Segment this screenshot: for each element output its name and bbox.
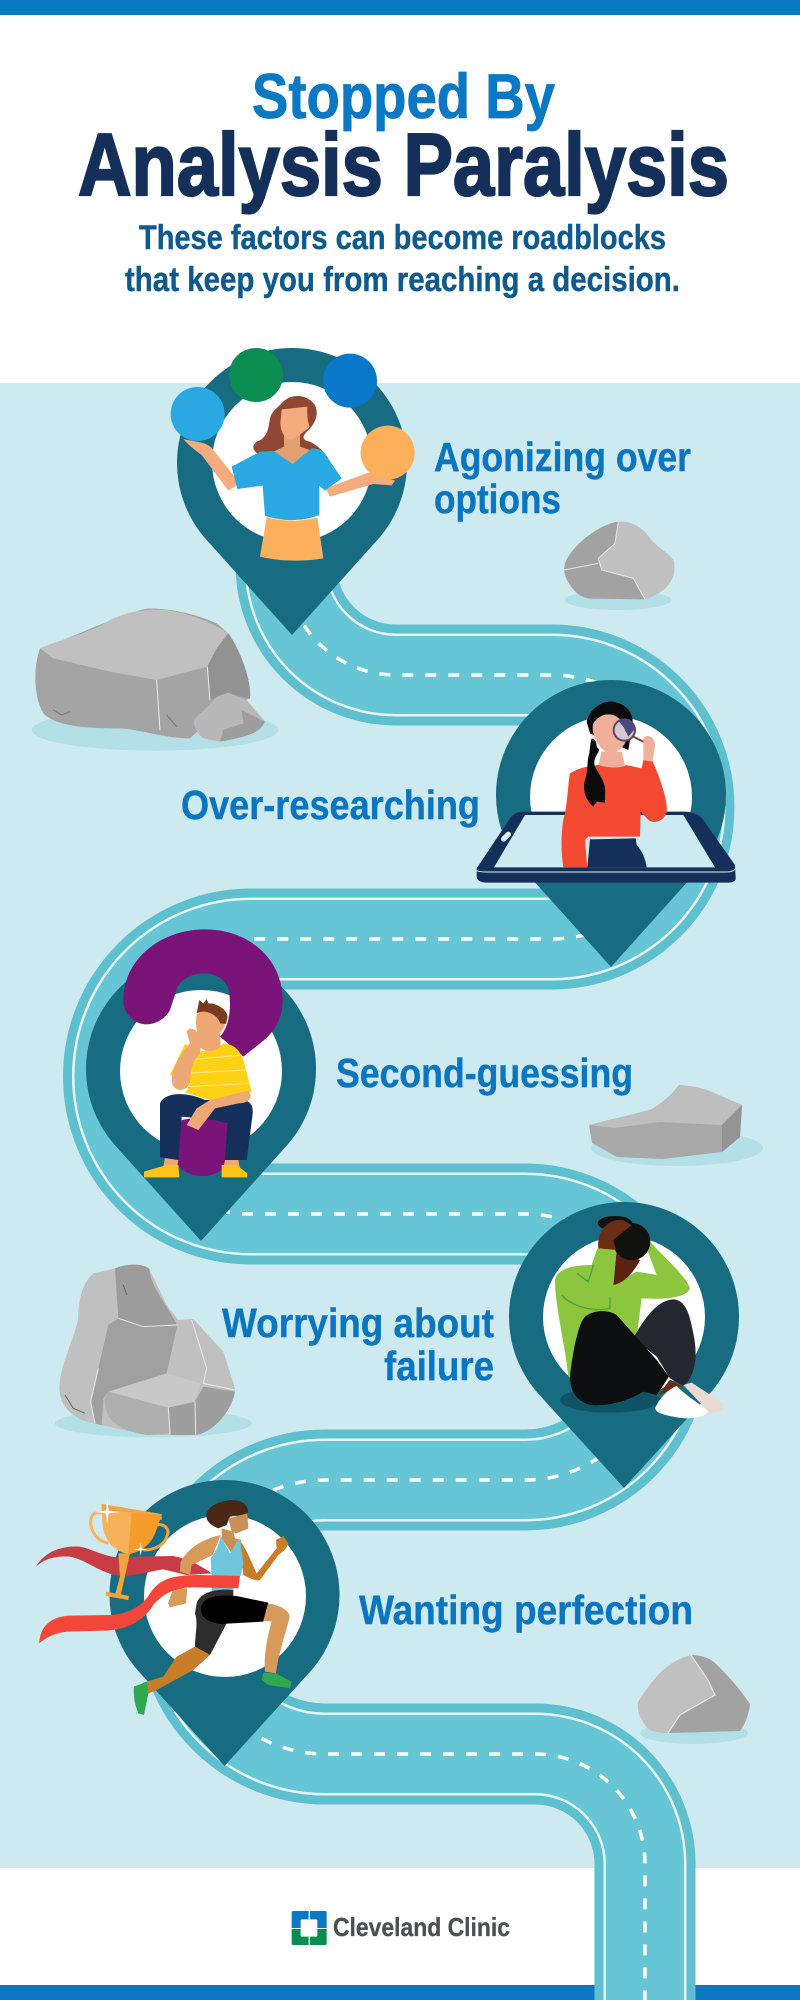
title (78, 62, 729, 214)
panel: light blue background (0, 383, 800, 1868)
pin 5: wanting perfection (36, 1480, 340, 1766)
pin 2: over-researching (477, 680, 736, 967)
logo: Cleveland Clinic: Cleveland Clinic (333, 1912, 510, 1942)
winding road (114, 560, 684, 2000)
rock: right flat (589, 1085, 763, 1166)
subtitle: that keep you from reaching a decision. (125, 261, 680, 299)
icon: woman juggling four balls (171, 348, 415, 561)
label: worrying about failure (222, 1300, 494, 1389)
rock: left cluster (55, 1265, 252, 1437)
label: agonizing over options: options (434, 476, 561, 522)
pin 1: juggling options (171, 348, 415, 635)
bottom bar (0, 1985, 800, 2000)
label: second-guessing: Second-guessing (336, 1050, 633, 1096)
subtitle (125, 219, 680, 299)
top bar (0, 0, 800, 15)
icon: cross logo (292, 1911, 327, 1945)
pin 4: worrying about failure (509, 1202, 739, 1488)
icon: man sitting on question mark (123, 929, 283, 1177)
label: worrying about failure: failure (384, 1343, 494, 1389)
rock: lower right (638, 1655, 750, 1744)
label: agonizing over options: Agonizing over (434, 434, 691, 480)
icon: runner with trophy and finish ribbon (36, 1498, 292, 1715)
icon: person crouching holding head (555, 1216, 723, 1418)
label: agonizing over options (434, 434, 691, 522)
title: Stopped By (252, 62, 555, 132)
label: over-researching: Over-researching (181, 782, 480, 828)
logo: Cleveland Clinic (292, 1911, 510, 1945)
pin 3: second-guessing (86, 929, 316, 1241)
icon: woman with magnifier emerging from tablet (477, 702, 736, 883)
rock: top right (564, 521, 674, 610)
subtitle: These factors can become roadblocks (139, 219, 666, 257)
label: worrying about failure: Worrying about (222, 1300, 494, 1346)
rock: large left with small rock (32, 608, 278, 751)
label: wanting perfection: Wanting perfection (359, 1587, 693, 1633)
